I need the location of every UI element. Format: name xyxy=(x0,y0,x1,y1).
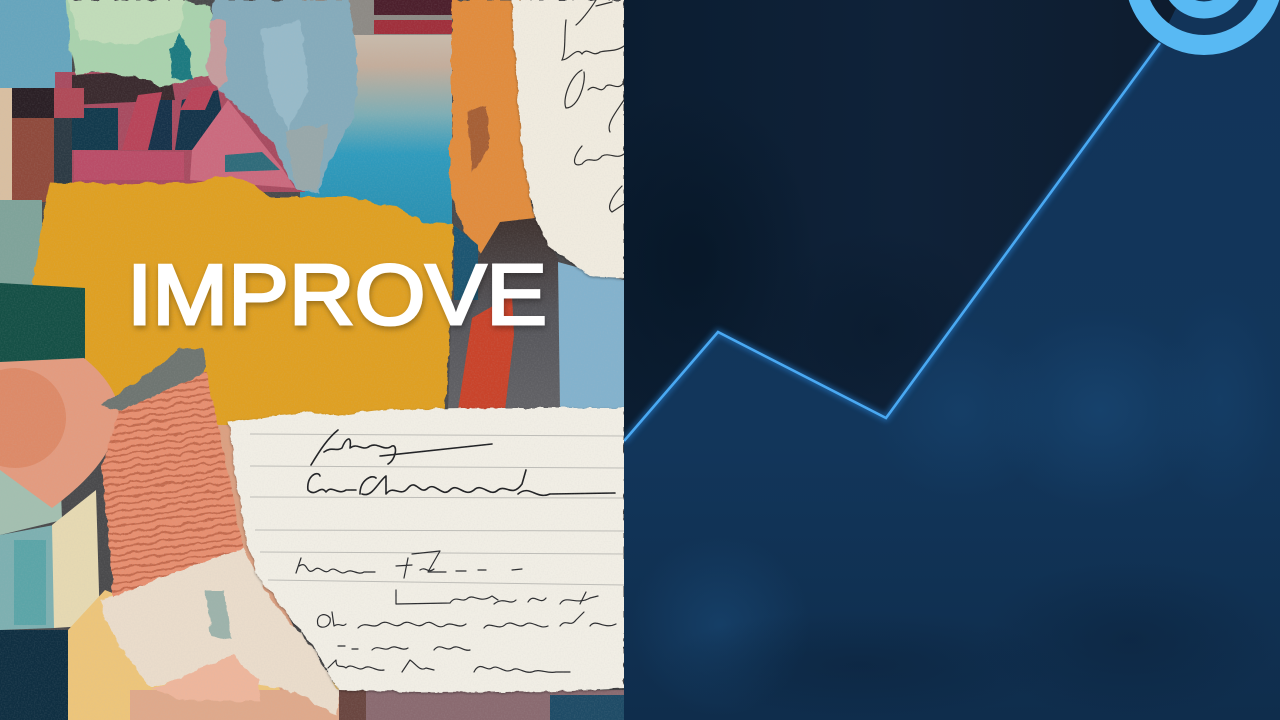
scrap: dark green card xyxy=(0,283,85,370)
scrap: bottom yellow and peach base xyxy=(68,590,340,720)
scrap: pale blue right xyxy=(558,262,624,410)
scrap: sage stripe paper xyxy=(0,470,62,535)
panel: paper collage xyxy=(0,0,624,720)
handwriting: note body xyxy=(296,551,616,672)
line chart: rising glowing line xyxy=(624,43,1160,441)
title: IMPROVE: IMPROVE xyxy=(127,248,547,343)
handwriting: note heading xyxy=(308,430,615,495)
ruled lines xyxy=(250,434,624,585)
scrap: cream letter xyxy=(512,0,624,278)
scrap: mustard yellow torn paper xyxy=(32,177,454,440)
dark area above the line xyxy=(624,0,1180,441)
scrap: grey blue torn paper xyxy=(207,0,358,193)
scrap: orange torn paper xyxy=(450,0,534,255)
scrap: pink and navy geometric painting xyxy=(55,70,305,192)
icon: target at end of line xyxy=(1135,0,1273,45)
scrap: navy card xyxy=(0,630,68,720)
dark vignette xyxy=(665,221,724,298)
scrap: white speckled knit xyxy=(100,547,339,716)
scrap: speckled charcoal tip xyxy=(100,348,204,415)
scrap: mint green torn paper xyxy=(66,0,212,88)
scrap: bottom mauve fabric xyxy=(339,690,624,720)
paper grain texture xyxy=(0,0,624,720)
soft light blobs xyxy=(630,290,1280,720)
scrap: woven textile strips xyxy=(0,88,84,290)
scrap: lined note xyxy=(229,408,624,692)
scrap: dark red band xyxy=(300,0,452,35)
scrap: grey wall and red strokes xyxy=(448,218,560,410)
scrap: peach rounded paper xyxy=(0,358,119,508)
scrap: coral underlay behind note xyxy=(218,425,294,690)
scrap: sky blue top left xyxy=(0,0,72,90)
panel: dark blue chart background xyxy=(560,0,1280,720)
scrap: teal painted wash xyxy=(300,30,452,230)
scrap: coral corrugated paper xyxy=(102,372,243,597)
scrap: teal knit fabric xyxy=(0,490,100,630)
handwriting: upper letter xyxy=(562,0,624,212)
